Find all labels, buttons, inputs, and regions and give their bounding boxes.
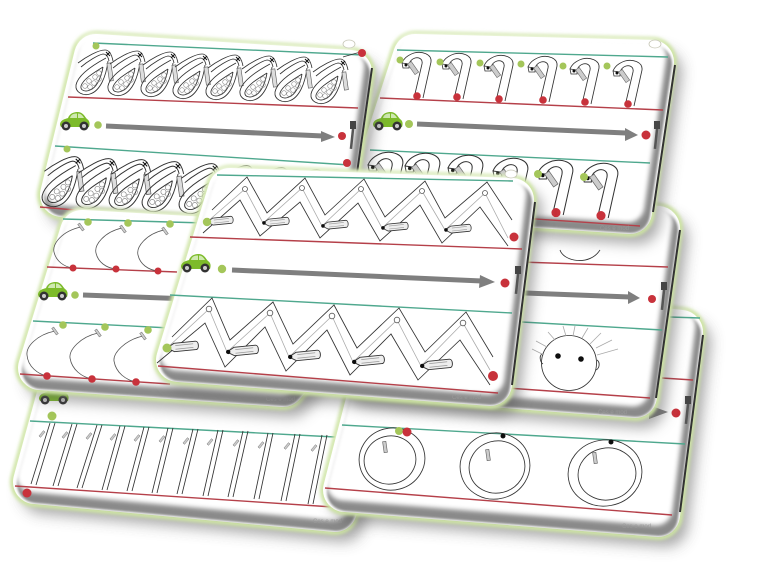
panel: zigzag worksheet xyxy=(157,170,535,401)
row 1 zigzag xyxy=(203,177,512,246)
circle 1 xyxy=(352,421,432,497)
guide lines xyxy=(507,262,668,398)
pencils xyxy=(39,431,317,451)
end dot and traffic light xyxy=(338,121,356,149)
panel: drops worksheet xyxy=(40,40,372,232)
row 1 dots xyxy=(70,218,174,274)
card frame xyxy=(176,170,535,394)
row 2 arcs xyxy=(27,331,143,382)
arrow xyxy=(71,291,190,299)
circle 2 xyxy=(453,425,537,507)
guide lines xyxy=(40,43,363,232)
panel: circles worksheet xyxy=(325,294,703,530)
row 2 pencils xyxy=(52,327,146,340)
row 2 hooks xyxy=(368,152,618,220)
watermark: Ces e mod xyxy=(313,519,342,525)
guide lines xyxy=(20,219,205,384)
card frame xyxy=(343,294,703,525)
row 1 arcs xyxy=(54,227,164,271)
end dot and traffic light xyxy=(500,266,521,294)
row 2 pencils xyxy=(166,341,453,370)
row 2 dots xyxy=(43,321,152,386)
panel: sticks worksheet xyxy=(15,294,408,525)
panel: face worksheet xyxy=(358,204,680,416)
row 2 dots xyxy=(64,146,351,167)
watermark: Ces e mod xyxy=(452,395,481,401)
guide lines xyxy=(158,175,522,393)
panel: arcs worksheet xyxy=(20,218,408,403)
circle 3 xyxy=(563,434,647,512)
arrow xyxy=(525,291,640,304)
icon: car wheels xyxy=(39,386,69,404)
watermark: Ces e mod xyxy=(600,226,629,232)
card frame xyxy=(33,294,408,520)
guide lines xyxy=(370,50,668,226)
arrow xyxy=(218,265,495,288)
end dot and traffic light xyxy=(648,282,667,310)
card frame xyxy=(38,226,408,395)
arc above line xyxy=(560,250,600,261)
icon: car xyxy=(373,112,403,130)
panel: hooks worksheet xyxy=(368,40,675,232)
row 1 start dots xyxy=(396,56,610,70)
face drawing xyxy=(532,326,618,390)
icon: car xyxy=(38,282,68,300)
row 1 pencils xyxy=(206,216,471,234)
row 1 hooks xyxy=(402,52,642,108)
guide lines xyxy=(325,317,700,515)
arrow xyxy=(94,121,335,142)
row 2 drops xyxy=(42,157,326,220)
end dot and traffic light xyxy=(642,121,660,149)
icon: car xyxy=(60,112,90,130)
row 2 zigzag xyxy=(157,298,493,385)
watermark: Ces e mod xyxy=(598,410,627,416)
end dot and traffic light xyxy=(672,396,691,424)
row 1 pencils xyxy=(78,223,168,235)
row 2 dots xyxy=(162,344,498,381)
row 1 start and end dots xyxy=(92,42,366,57)
vertical strokes xyxy=(31,423,327,504)
card frame xyxy=(368,40,675,222)
row 1 drops xyxy=(76,50,348,104)
icon: car xyxy=(181,254,211,272)
row 2 start dots xyxy=(534,170,588,181)
guide lines xyxy=(15,421,335,507)
card frame xyxy=(60,40,372,225)
start and end dots xyxy=(22,412,56,498)
arrow xyxy=(649,405,668,419)
watermark: Ces e mod xyxy=(266,397,295,403)
card frame xyxy=(358,204,680,406)
watermark: Ces e mod xyxy=(622,524,651,530)
arrow xyxy=(405,120,638,141)
row 1 dots xyxy=(203,218,519,242)
